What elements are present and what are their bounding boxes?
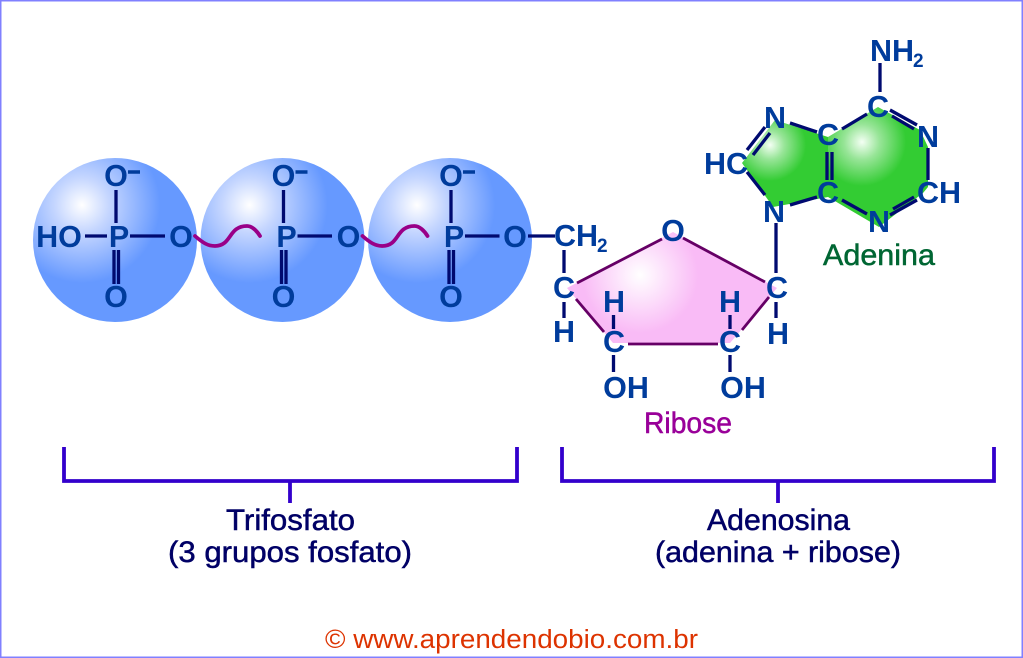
adenine five-member ring (742, 120, 828, 207)
phosphate atom labels: O (337, 220, 360, 254)
adenine atom labels: N (763, 195, 785, 229)
ribose atom labels: O (661, 214, 685, 248)
high-energy bond 1 (195, 226, 260, 246)
phosphate atom labels: O (439, 280, 463, 314)
phosphate atom labels: O (104, 280, 128, 314)
phosphate atom labels (36, 159, 527, 314)
negative charges (128, 170, 475, 174)
label: adenina + ribose: (adenina + ribose) (655, 536, 901, 569)
footer credit: © www.aprendendobio.com.br (325, 626, 699, 654)
phosphate atom labels: P (444, 220, 464, 254)
adenine bonds (747, 63, 928, 215)
adenine atom labels: CH (917, 176, 961, 210)
adenine atom labels: C (817, 118, 839, 152)
adenine atom labels: C (867, 90, 889, 124)
CH2 subscript: 2 (597, 236, 608, 257)
ribose atom labels: H (603, 285, 625, 319)
adenine atom labels: C (817, 176, 839, 210)
ribose atom labels: C (603, 325, 625, 359)
adenine atom labels: N (868, 205, 890, 239)
phosphate atom labels: P (276, 220, 297, 254)
panel: adenine (704, 34, 961, 272)
bracket: trifosfato (64, 447, 517, 503)
phosphate sphere 1 (33, 158, 197, 322)
adenine atom labels: HC (704, 147, 748, 181)
phosphate bonds (85, 190, 500, 284)
high-energy bond 2 (362, 226, 428, 246)
phosphate atom labels: O (272, 280, 295, 314)
label: 3 grupos fosfato: (3 grupos fosfato) (168, 536, 412, 569)
phosphate sphere 2 (200, 158, 364, 322)
ribose atom labels: H (719, 285, 741, 319)
phosphate atom labels: O (503, 220, 527, 254)
ribose atom labels: CH (554, 219, 598, 253)
panel: trifosfato phosphate groups (33, 158, 532, 322)
adenine atom labels: N (764, 101, 786, 135)
adenine atom labels: N (917, 120, 939, 154)
phosphate sphere 3 (368, 158, 532, 322)
ribose ring bonds (576, 238, 769, 344)
phosphate atom labels: P (109, 220, 129, 254)
phosphate atom labels: HO (36, 220, 82, 254)
phosphate atom labels: O (439, 159, 463, 193)
adenine six-member ring (828, 107, 928, 227)
ribose atom labels: C (766, 271, 788, 305)
ribose atom labels: H (767, 317, 789, 351)
ribose atom labels: H (553, 315, 575, 349)
ribose atom labels: C (553, 271, 575, 305)
panel: ribose (528, 214, 789, 440)
label: trifosfato: Trifosfato (226, 504, 355, 537)
ribose atom labels: C (719, 325, 741, 359)
phosphate atom labels: O (169, 220, 193, 254)
ribose label: Ribose (644, 407, 732, 440)
phosphate atom labels: O (104, 159, 128, 193)
ribose atom labels: OH (720, 371, 766, 405)
label: adenosina: Adenosina (707, 504, 850, 537)
ribose side bonds (528, 223, 776, 372)
ribose ring fill (567, 232, 777, 343)
phosphate atom labels: O (272, 159, 295, 193)
adenine atom labels: NH (870, 34, 914, 68)
adenine atom labels (704, 34, 961, 239)
ribose atom labels (553, 214, 789, 405)
NH2 subscript: 2 (913, 51, 924, 72)
ribose atom labels: OH (603, 371, 649, 405)
adenine label: Adenina (823, 239, 935, 272)
bracket: adenosina (562, 447, 994, 503)
